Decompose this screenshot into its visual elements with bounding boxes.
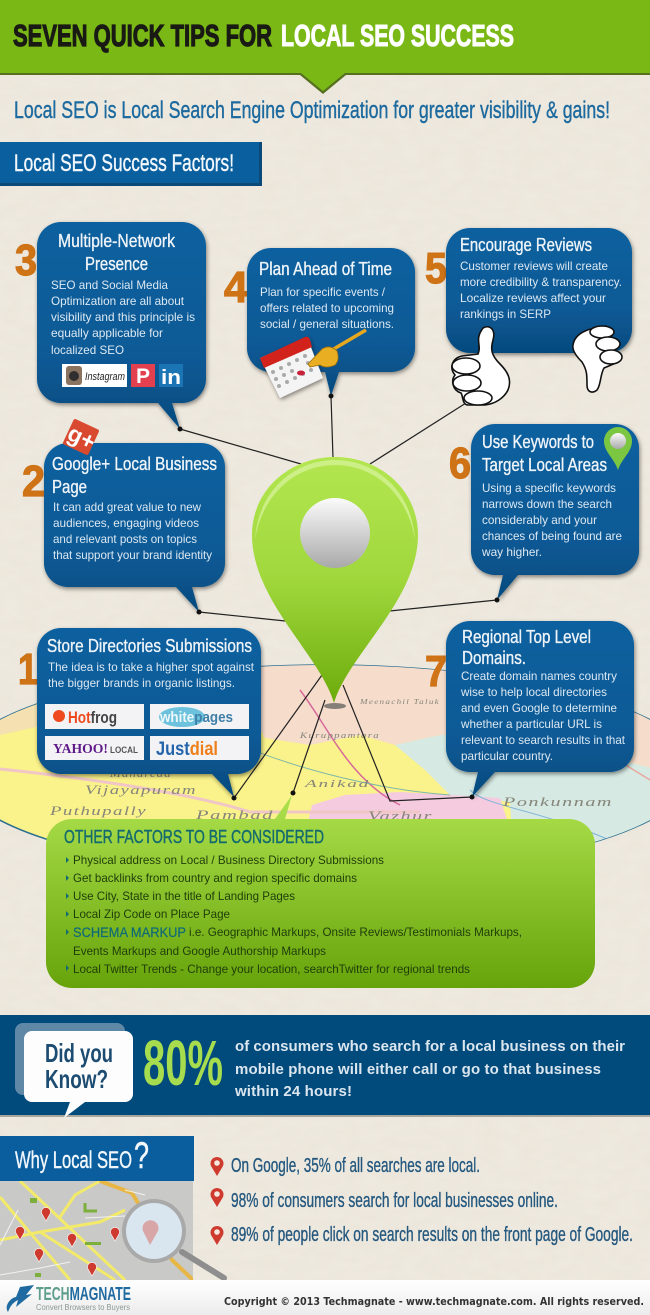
map background (0, 664, 650, 843)
panel: other factors (46, 795, 595, 988)
section heading: success factors (0, 142, 262, 186)
title: LOCAL SEO SUCCESS (281, 18, 514, 53)
factor list: Physical address on Local / Business Directory Submissions (73, 853, 384, 867)
logo wordmark (36, 1284, 131, 1312)
icon: techmagnate logo mark (7, 1285, 34, 1312)
heading: Presence (85, 254, 148, 274)
stat one: On Google, 35% of all searches are local. (231, 1155, 480, 1177)
title: SEVEN QUICK TIPS FOR (13, 18, 272, 53)
body text: way higher. (481, 545, 542, 559)
map place labels: Manarcad (109, 765, 172, 780)
heading: Multiple-Network (58, 231, 176, 251)
panel: tip 7 regional top level domains (425, 621, 634, 797)
heading: Page (52, 477, 87, 497)
panel: tip 3 multiple-network presence (15, 222, 206, 429)
heading: Regional Top Level (462, 627, 591, 647)
factor list: Get backlinks from country and region specific domains (73, 871, 357, 885)
stat description: mobile phone will either call or go to that business (235, 1061, 601, 1078)
green callout box (46, 795, 595, 988)
body text (460, 669, 626, 763)
map pins (15, 1207, 120, 1276)
body text: chances of being found are (482, 529, 622, 543)
body text (51, 278, 195, 357)
stat description: within 24 hours! (234, 1083, 352, 1100)
speech bubble (24, 1031, 133, 1118)
body text (260, 285, 394, 331)
stat description: of consumers who search for a local business on their (235, 1038, 625, 1055)
body text: narrows down the search (482, 497, 612, 511)
bubble 4 (247, 248, 415, 396)
body text: more credibility & transparency. (460, 275, 622, 289)
central location pin (252, 457, 418, 709)
heading: Encourage Reviews (460, 235, 592, 255)
body text: Optimization are all about (51, 294, 185, 308)
statistics list (210, 1155, 633, 1246)
factor list: Use City, State in the title of Landing Pages (73, 889, 295, 903)
icon: small green pin (604, 427, 632, 470)
logo: whitepages (150, 704, 249, 729)
icon: calendar (260, 337, 323, 398)
bubble 7 (446, 621, 634, 797)
footer (0, 1280, 650, 1315)
number 1: 1 (18, 645, 38, 694)
number 2: 2 (22, 457, 45, 506)
icon: red pin two (210, 1188, 224, 1207)
heading (482, 432, 607, 475)
map place labels: Pambad (194, 807, 274, 822)
panel: tip 5 encourage reviews (425, 228, 632, 405)
body text (53, 500, 212, 562)
stat description (234, 1038, 625, 1100)
logo: justdial: Justdial (156, 739, 218, 760)
body text (48, 660, 255, 690)
number 4: 4 (224, 263, 249, 312)
speech bubble back (15, 1023, 125, 1095)
body text: rankings in SERP (460, 307, 551, 321)
heading: Plan Ahead of Time (259, 259, 392, 279)
factor list: Events Markups and Google Authorship Markups (73, 944, 326, 958)
body text: the bigger brands in organic listings. (48, 676, 235, 690)
stat: 80%: 80% (143, 1027, 223, 1099)
heading: Use Keywords to (482, 432, 594, 452)
bubble 2 (44, 443, 225, 612)
logo: yahoo local: LOCAL (110, 745, 138, 755)
map place labels: Vijayapuram (85, 782, 197, 797)
header banner (0, 0, 650, 94)
icon: pinterest (131, 364, 155, 388)
number 5: 5 (425, 244, 447, 293)
body text: wise to help local directories (460, 685, 607, 699)
city map illustration (0, 1181, 193, 1280)
body text: localized SEO (51, 343, 124, 357)
icon: thumbs up (452, 327, 510, 405)
panel: tip 2 google+ local business page (22, 418, 225, 612)
map place labels: Puthupally (49, 803, 147, 818)
logo: hotfrog: Hotfrog (68, 708, 117, 727)
map place labels: Meenachil Taluk (359, 698, 440, 706)
icon: pinterest: P (136, 365, 150, 388)
icon: linkedin: in (161, 367, 181, 389)
body text: Plan for specific events / (260, 285, 386, 299)
section heading: success factors: Local SEO Success Factors! (14, 150, 234, 177)
map place labels: Ponkunnam (501, 794, 613, 809)
logo: yahoo local (45, 736, 144, 760)
factor list: SCHEMA MARKUP (73, 925, 186, 940)
factor list (73, 853, 522, 976)
body text: Create domain names country (461, 669, 617, 683)
section heading (0, 1135, 194, 1181)
number 6: 6 (449, 439, 471, 488)
body text: audiences, engaging videos (53, 516, 199, 530)
number 3: 3 (15, 236, 37, 285)
body text: whether a particular URL is (460, 717, 602, 731)
body text: Customer reviews will create (460, 259, 608, 273)
bubble 1 (37, 628, 261, 797)
map place labels: Vazhur (368, 808, 433, 823)
heading: Target Local Areas (482, 455, 607, 475)
body text: The idea is to take a higher spot against (48, 660, 255, 674)
map place labels: Kuruppamtara (299, 731, 380, 740)
bullet arrows (66, 857, 69, 971)
speech bubble: Know? (45, 1064, 108, 1094)
icon: instagram: Instagram (85, 371, 125, 383)
logo wordmark: Convert Browsers to Buyers (36, 1302, 130, 1312)
heading (52, 454, 217, 497)
body text: relevant to search results in that (461, 733, 626, 747)
panel: tip 6 use keywords (449, 424, 639, 600)
icon: instagram (62, 364, 127, 387)
icon: pointing hand (308, 330, 366, 367)
panel: why local seo (0, 1135, 633, 1280)
map place labels (49, 698, 613, 823)
heading: Domains. (462, 648, 526, 668)
body text: and even Google to determine (461, 701, 617, 715)
icon: magnifying glass (122, 1199, 224, 1278)
body text: considerably and your (482, 513, 597, 527)
body text: and relevant posts on topics (53, 532, 197, 546)
connector lines (180, 396, 497, 801)
connector end dots (178, 394, 500, 800)
bubble 3 (37, 222, 206, 429)
logo: hotfrog (45, 704, 144, 729)
body text (460, 259, 622, 321)
icon: google plus: g+ (64, 420, 100, 455)
body text: offers related to upcoming (260, 301, 394, 315)
section heading: ? (134, 1135, 149, 1176)
heading: Store Directories Submissions (47, 636, 252, 656)
bubble 5 (446, 228, 632, 353)
factor list: Local Zip Code on Place Page (73, 907, 230, 921)
section heading: Why Local SEO (15, 1147, 132, 1174)
bubble 6 (471, 424, 639, 600)
icon: red pin one (210, 1157, 224, 1176)
heading: Google+ Local Business (52, 454, 217, 474)
body text: social / general situations. (260, 317, 394, 331)
body text: equally applicable for (51, 326, 163, 340)
icon: linkedin (159, 364, 183, 389)
logo: yahoo local: YAHOO! (53, 742, 108, 757)
logo wordmark: TECHMAGNATE (36, 1284, 131, 1304)
icon: red pin three (210, 1226, 224, 1245)
heading (58, 231, 176, 274)
heading: OTHER FACTORS TO BE CONSIDERED (64, 827, 324, 847)
number 7: 7 (425, 647, 447, 696)
factor list: Local Twitter Trends - Change your location, searchTwitter for regional trends (73, 962, 470, 976)
panel: did you know (0, 1015, 650, 1118)
body text: that support your brand identity (53, 548, 212, 562)
body text: Localize reviews affect your (460, 291, 606, 305)
logo: justdial (150, 736, 249, 760)
factor list: i.e. Geographic Markups, Onsite Reviews/Testimonials Markups, (189, 925, 522, 939)
body text: particular country. (461, 749, 553, 763)
logo: whitepages: whitepages (159, 709, 233, 726)
map place labels: Anikad (303, 778, 370, 790)
body text: visibility and this principle is (51, 310, 195, 324)
speech bubble: Did you (45, 1038, 113, 1068)
body text (481, 481, 622, 559)
heading (462, 627, 591, 668)
body text: It can add great value to new (53, 500, 201, 514)
icon: thumbs down (573, 326, 622, 392)
panel: tip 4 plan ahead of time (224, 248, 415, 398)
body text: Using a specific keywords (482, 481, 616, 495)
panel: tip 1 store directories submissions (18, 628, 261, 797)
body text: SEO and Social Media (51, 278, 168, 292)
